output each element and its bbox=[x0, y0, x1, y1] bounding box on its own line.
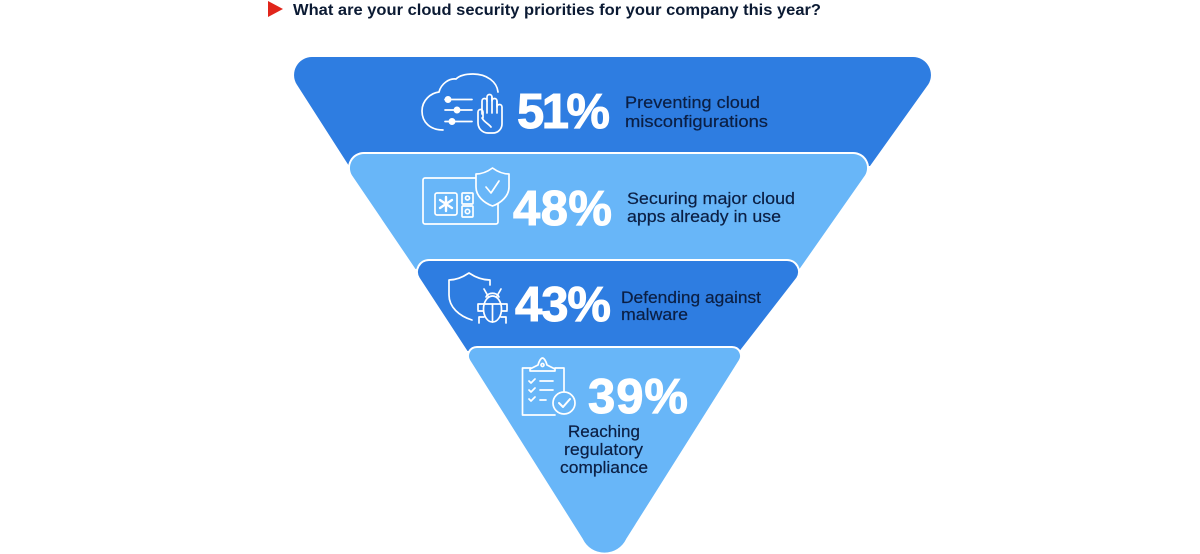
icon: app card with shield bbox=[423, 168, 509, 224]
value 43%: 43% bbox=[515, 278, 611, 332]
band 4 shape bbox=[468, 347, 741, 554]
icon: red arrow marker bbox=[268, 1, 283, 17]
icon: shield with bug bbox=[449, 273, 507, 323]
icon: cloud with sliders and hand bbox=[422, 74, 502, 133]
label: apps already in use bbox=[627, 208, 781, 226]
value 39%: 39% bbox=[588, 370, 688, 424]
label: malware bbox=[621, 306, 688, 324]
panel: 51% preventing cloud misconfigurations bbox=[294, 57, 931, 166]
band 2 shape bbox=[349, 153, 868, 270]
band 3 shape bbox=[417, 260, 799, 352]
value 51%: 51% bbox=[517, 85, 610, 139]
icon: clipboard with check bbox=[522, 358, 575, 415]
panel: 43% defending against malware bbox=[417, 260, 799, 352]
label: Defending against bbox=[621, 289, 761, 307]
panel: 48% securing major cloud apps bbox=[349, 153, 868, 270]
label: Securing major cloud bbox=[627, 190, 795, 208]
band 1 shape bbox=[294, 57, 931, 166]
label: Preventing cloud bbox=[625, 94, 760, 112]
label: compliance bbox=[560, 459, 648, 477]
label: Reaching bbox=[568, 423, 640, 441]
label: regulatory bbox=[564, 441, 644, 459]
panel: 39% reaching regulatory compliance bbox=[468, 347, 741, 554]
question text: What are your cloud security priorities for your company this year? bbox=[293, 2, 821, 19]
heading bbox=[268, 1, 821, 19]
value 48%: 48% bbox=[513, 182, 612, 236]
label: misconfigurations bbox=[625, 113, 768, 131]
